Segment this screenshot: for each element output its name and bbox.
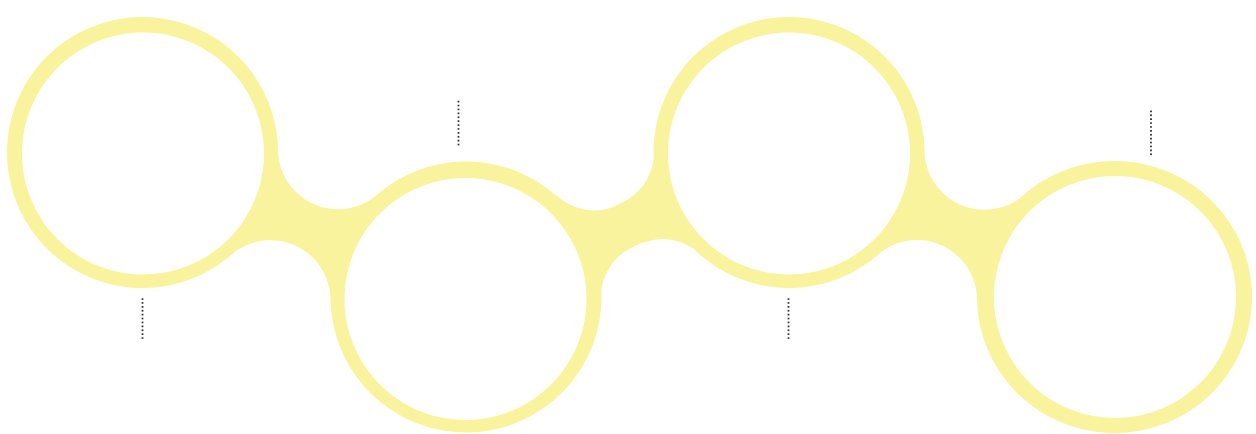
ring 4 outer	[977, 161, 1252, 433]
leader line under ring 3	[788, 298, 790, 339]
ring 2 outer	[330, 162, 602, 432]
leader line under ring 1	[142, 298, 144, 339]
connector 3 to 4	[789, 150, 1114, 300]
ring 2 interior	[344, 178, 586, 420]
connector 2 to 3	[466, 153, 789, 300]
ring 1 interior	[22, 32, 264, 274]
leader line above ring 2	[458, 101, 460, 146]
connector 1 to 2	[142, 150, 466, 299]
leader line above ring 4	[1150, 110, 1152, 156]
ring 1 outer	[7, 17, 278, 288]
ring 3 interior	[668, 32, 910, 274]
ring 4 interior	[994, 176, 1236, 418]
ring 3 outer	[654, 17, 924, 288]
dotted leader lines	[142, 101, 1151, 339]
